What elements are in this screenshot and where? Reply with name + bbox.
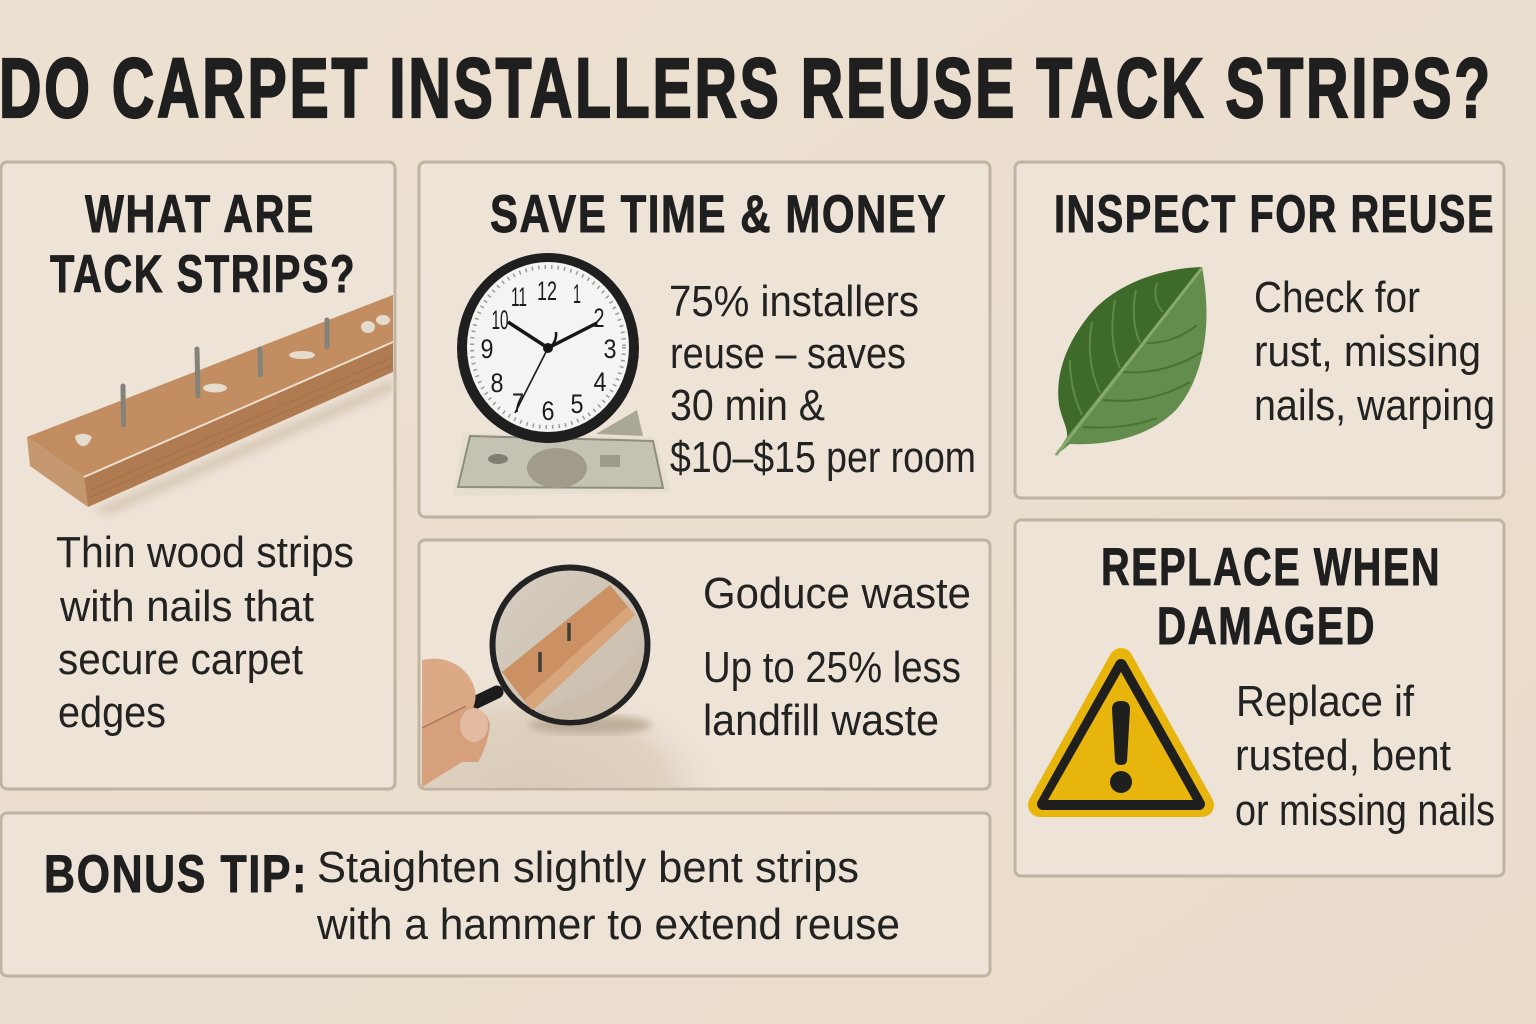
text: savings: 75% installers [669,277,919,326]
text: replacement criteria: rusted, bent [1235,731,1451,780]
text: savings: reuse – saves [670,329,906,378]
heading: bonus tip: BONUS TIP: [44,845,308,904]
text: reduce waste: Goduce waste [703,569,971,618]
clock numerals: 2 [594,303,604,333]
clock numerals: 6 [542,396,554,426]
panel: reduce waste [418,538,992,790]
heading: replace when damaged [1101,538,1441,656]
icon: leaf [1055,267,1206,456]
clock numerals: 8 [490,368,504,398]
panel: save time and money [419,162,990,517]
text: bonus tip detail: with a hammer to extend reuse [316,900,900,949]
heading: what are tack strips: TACK STRIPS? [50,245,356,304]
text: reduce waste [703,569,971,745]
text: tack strip definition: secure carpet [58,635,303,684]
text: bonus tip detail: Staighten slightly bent strips [317,843,859,892]
heading: what are tack strips: WHAT ARE [85,185,315,244]
clock numerals: 3 [604,334,616,364]
icon: magnifying glass over tack strip [421,564,692,787]
clock numerals: 4 [594,367,606,397]
panel: replace when damaged [1015,520,1504,876]
clock numerals: 1 [573,279,581,309]
clock numerals: 5 [570,389,584,419]
text: reduce waste: landfill waste [703,696,939,745]
text: replacement criteria [1235,677,1495,835]
text: inspection checklist [1254,273,1495,430]
text: savings: 30 min & [670,381,825,430]
text: savings: $10–$15 per room [670,433,976,482]
text: tack strip definition [56,528,354,737]
icon: tack strip [27,295,393,515]
text: bonus tip detail [316,843,900,949]
clock numerals [480,276,616,426]
text: savings [669,277,976,482]
clock numerals: 10 [492,305,508,335]
icon: warning triangle [1040,660,1202,805]
lens view: tack strip [502,585,641,720]
panel: what are tack strips [1,162,395,789]
clock numerals: 12 [537,276,557,306]
heading: save time and money: SAVE TIME & MONEY [490,185,947,244]
text: replacement criteria: or missing nails [1235,786,1495,835]
panel: bonus tip [1,813,990,976]
icon: dollar bills [453,410,671,496]
text: inspection checklist: rust, missing [1254,327,1481,376]
text: tack strip definition: with nails that [59,582,314,631]
text: tack strip definition: edges [58,688,166,737]
text: inspection checklist: nails, warping [1254,381,1495,430]
icon: clock [457,253,639,443]
clock numerals: 9 [480,334,494,364]
clock numerals: 11 [511,282,527,312]
text: reduce waste: Up to 25% less [703,643,961,692]
panel: inspect for reuse [1015,162,1504,498]
text: inspection checklist: Check for [1254,273,1420,322]
text: replacement criteria: Replace if [1236,677,1415,726]
clock numerals: 7 [512,388,524,418]
text: tack strip definition: Thin wood strips [56,528,354,577]
heading: what are tack strips [50,185,356,304]
heading: replace when damaged: DAMAGED [1157,597,1376,656]
